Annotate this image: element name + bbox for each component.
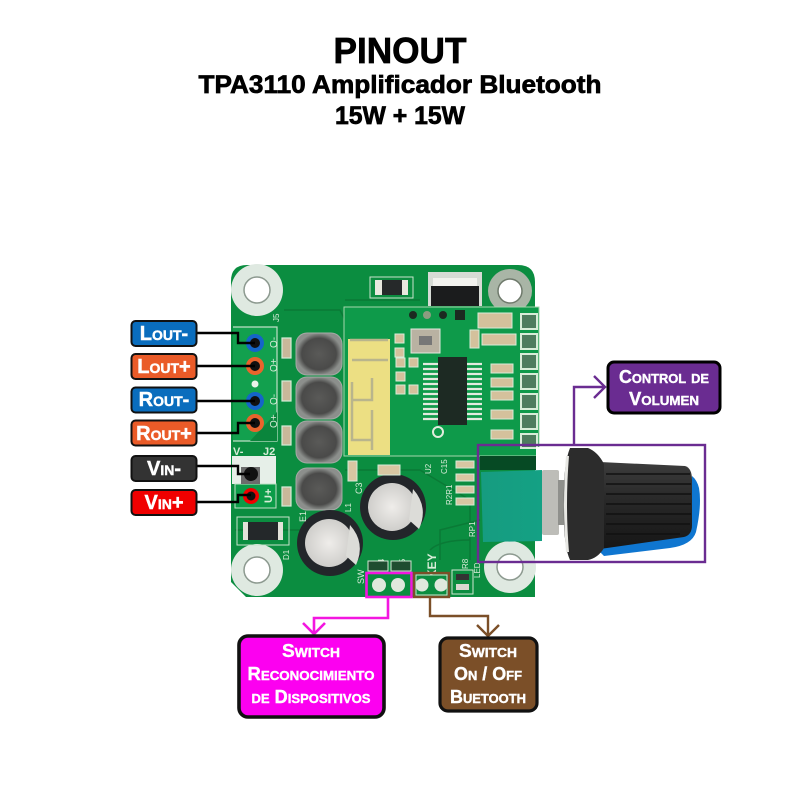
small capacitors <box>282 338 291 506</box>
label: Lout+: Lout+ <box>137 356 191 378</box>
label: Lout- <box>132 321 196 346</box>
output pins <box>243 334 264 504</box>
brown switch highlight <box>414 573 449 597</box>
knob ribs <box>606 474 691 534</box>
silkscreen labels: SW <box>356 569 366 584</box>
silk: J2: J2 <box>263 446 275 458</box>
silk: J5: J5 <box>272 313 281 322</box>
diode D1 <box>237 517 289 545</box>
silk: output plus: O+ <box>269 358 280 372</box>
antenna <box>348 339 390 455</box>
wire: Rout- <box>197 400 255 402</box>
white backdrop <box>536 447 704 560</box>
label: Vin- <box>132 456 196 481</box>
silkscreen labels: R8 <box>461 558 470 569</box>
silk: U+: U+ <box>263 489 275 503</box>
pot shaft <box>558 480 570 525</box>
knob metal edge <box>564 456 569 552</box>
amplifier board <box>231 264 539 597</box>
silkscreen labels: R4 <box>377 558 386 569</box>
label: switch on/off: Buetooth <box>450 687 526 707</box>
silk: V-: V- <box>233 446 244 458</box>
bluetooth module <box>344 307 539 456</box>
purple arrow <box>574 376 605 445</box>
label: Rout- <box>132 388 196 412</box>
mounting hole bottom right <box>484 541 536 593</box>
label: Vin+: Vin+ <box>144 492 184 514</box>
silkscreen labels: RP1 <box>468 521 477 537</box>
label: control de volumen <box>608 362 720 413</box>
resistors R4 R5 <box>368 561 411 571</box>
header pads <box>521 314 537 448</box>
inductors <box>296 333 342 510</box>
subtitle: power: 15W + 15W <box>335 102 465 130</box>
silk: outputs: O- <box>269 337 280 348</box>
silkscreen labels: C3 <box>354 482 364 494</box>
silkscreen labels: R6 <box>368 311 377 322</box>
silkscreen labels: C15 <box>440 459 449 474</box>
regulator U1 <box>428 272 482 306</box>
silkscreen labels: L1 <box>344 503 353 512</box>
resistor R6 <box>370 277 413 298</box>
silk: output minus: O- <box>269 394 280 405</box>
IC <box>423 357 482 425</box>
knob grip <box>600 462 692 549</box>
header holes <box>409 310 465 320</box>
label: switch reconocimiento: Reconocimiento <box>248 664 374 684</box>
wire: Lout- <box>197 333 255 343</box>
dark header shadow <box>480 456 536 470</box>
label: Vin+ <box>132 490 196 515</box>
wire: Vin- <box>197 466 250 474</box>
via ring <box>433 427 443 437</box>
label: switch reconocimiento <box>239 636 384 717</box>
wire: Vin+ <box>197 495 251 502</box>
knob collar <box>564 448 604 560</box>
wire: Lout+ <box>197 365 255 367</box>
purple highlight box <box>478 445 705 562</box>
crystal <box>411 329 440 353</box>
potentiometer with knob <box>480 447 704 560</box>
label: control de volumen: Control de <box>619 367 709 387</box>
capacitor C1 <box>297 510 363 576</box>
silkscreen labels: LED <box>473 562 482 578</box>
wire: Rout+ <box>197 423 255 433</box>
capacitor C3 <box>360 474 426 540</box>
label: switch on/off: Switch <box>459 641 517 661</box>
silkscreen labels: R5 <box>398 558 407 569</box>
pink arrow <box>303 597 388 634</box>
mounting hole top left <box>231 264 283 316</box>
label: switch reconocimiento: de Dispositivos <box>252 687 371 707</box>
output connector outline <box>233 327 277 441</box>
title: PINOUT <box>334 30 466 71</box>
label: switch on/off: On / Off <box>454 664 522 684</box>
SMD parts <box>395 313 516 439</box>
label: switch on/off <box>440 638 537 711</box>
pin wires <box>197 333 255 502</box>
label: Lout-: Lout- <box>140 323 188 345</box>
label: Vin-: Vin- <box>147 458 181 480</box>
silkscreen labels: D1 <box>282 549 291 560</box>
brown arrow <box>430 597 499 636</box>
power connector pad <box>232 456 276 484</box>
silkscreen labels: R2R1 <box>445 484 454 505</box>
subtitle: model: TPA3110 Amplificador Bluetooth <box>198 71 602 99</box>
silkscreen labels <box>282 311 482 584</box>
LED R8 <box>452 570 473 594</box>
knob blue skirt <box>600 476 700 556</box>
pot body <box>481 470 542 542</box>
mounting hole bottom left <box>231 544 283 596</box>
board PCB <box>231 265 535 597</box>
resistors lower <box>348 461 474 505</box>
label: Rout-: Rout- <box>139 389 189 411</box>
label: switch reconocimiento: Switch <box>282 641 340 661</box>
silk: KEY: KEY <box>425 553 439 578</box>
module PCB <box>344 307 539 456</box>
pot metal bushing <box>542 470 559 535</box>
traces <box>235 300 480 560</box>
silkscreen labels: U2 <box>424 463 433 474</box>
silk: output plus second: O+ <box>269 414 280 428</box>
silkscreen labels: E1 <box>298 511 308 522</box>
mounting hole top right <box>488 269 532 313</box>
switch pads right <box>416 575 448 595</box>
label: control de volumen: Volumen <box>629 389 699 409</box>
label: Rout+: Rout+ <box>136 423 192 445</box>
switch pads left <box>369 575 409 595</box>
pink switch highlight <box>366 573 412 597</box>
